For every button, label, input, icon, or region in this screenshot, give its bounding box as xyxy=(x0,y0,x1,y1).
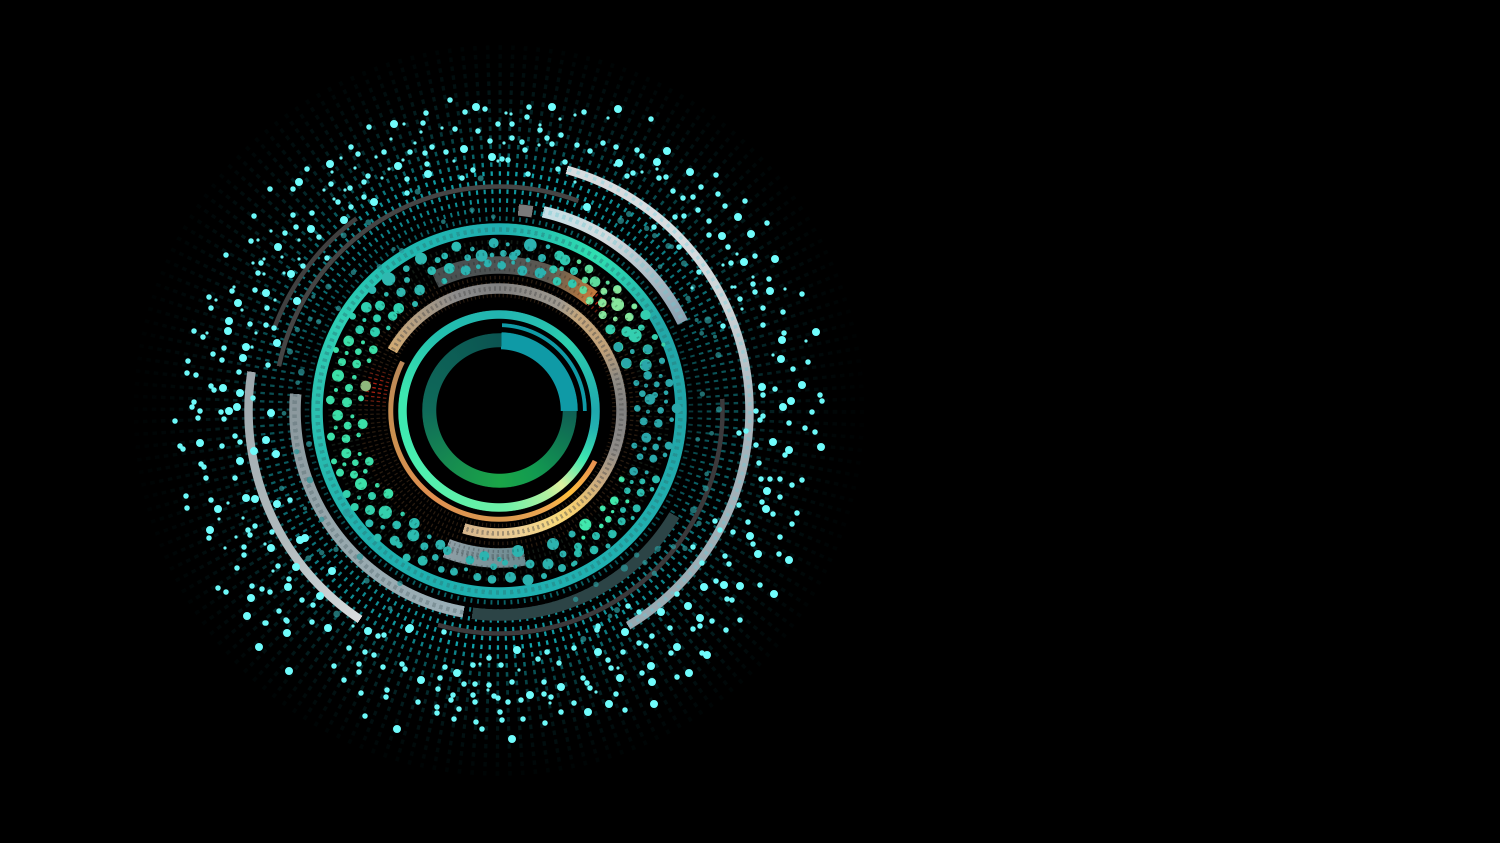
ring: main teal ring xyxy=(311,222,687,598)
bright cyan dots: small xyxy=(207,113,806,703)
ticks on outer right pale arc xyxy=(568,168,752,627)
inner dots: bottom side xyxy=(421,534,524,584)
inner dots: right side xyxy=(569,286,682,567)
arc: outer right pale arc xyxy=(566,166,754,630)
marker: small grey block xyxy=(518,204,534,218)
ring: bright teal to mint ring xyxy=(398,310,600,512)
arc: thin dark lower right arc xyxy=(438,398,725,636)
arc: thin teal quarter xyxy=(502,323,587,411)
inner dots: bottom right gap xyxy=(505,530,610,586)
bright cyan dots: large xyxy=(200,107,821,739)
arc: outer left pale arc xyxy=(244,371,362,623)
arc: upper right pale band xyxy=(542,206,688,324)
arc: bottom grey band xyxy=(443,539,526,568)
inner dots: left side xyxy=(326,253,428,566)
ring: inner green-teal ring xyxy=(422,333,576,488)
ticks on main teal ring xyxy=(311,222,687,598)
ticks on upper right pale band xyxy=(543,206,686,323)
ticks on lower left grey band xyxy=(292,394,464,614)
arc: grey and gold tick ring xyxy=(371,282,627,538)
arc: teal quarter wedge xyxy=(501,332,578,411)
arc: top dark grey band xyxy=(432,256,598,305)
inner dots: top side xyxy=(461,238,665,371)
dim teal dots in outer rings xyxy=(271,175,722,642)
arc: thin dark top arc xyxy=(276,184,579,366)
arc: lower left grey band xyxy=(289,394,464,618)
ticks on grey and gold ring xyxy=(391,286,624,536)
inner dots: top left gap xyxy=(427,242,461,284)
bright cyan dots: medium xyxy=(175,100,822,729)
tick overlay on inner dots xyxy=(334,246,664,576)
arc: lower right dark band xyxy=(472,512,680,621)
ticks on bottom grey band xyxy=(447,544,524,559)
radial data visualisation xyxy=(170,64,828,758)
arc: thin orange ring xyxy=(388,360,598,522)
arc: thin dark upper left arc xyxy=(273,216,358,330)
